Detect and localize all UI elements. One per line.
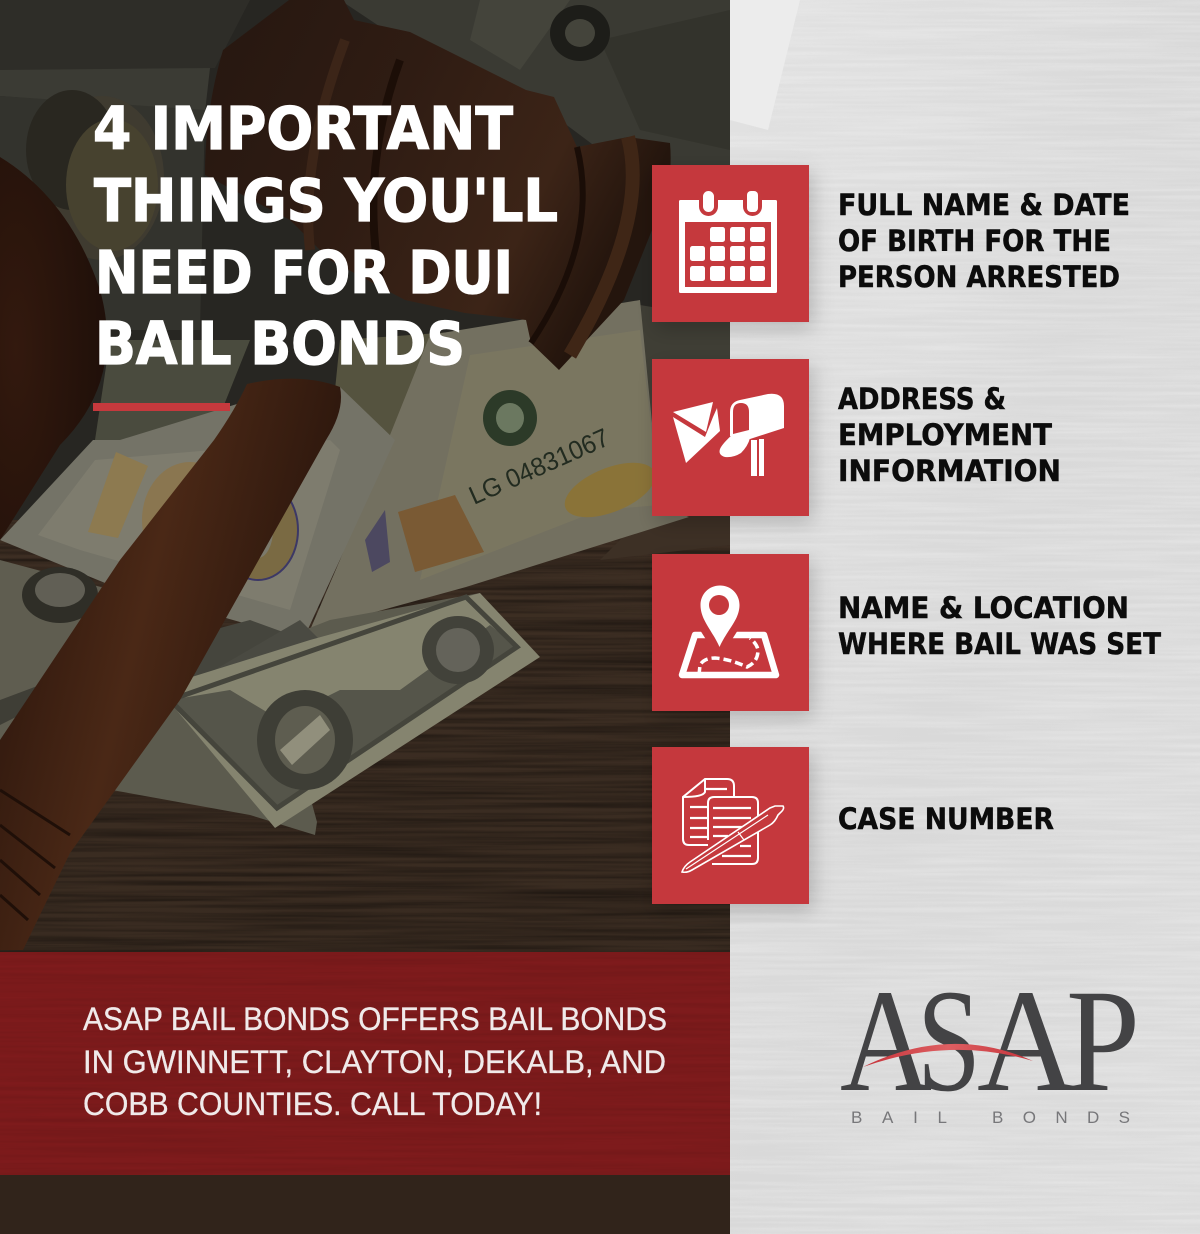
- one dollar bill: [150, 593, 540, 828]
- gavel head: [205, 0, 671, 370]
- logo tagline: BONDS: [992, 1108, 1130, 1127]
- photo panel: gavel and money on wood: [0, 0, 730, 1234]
- bill with large 100 numerals: [0, 387, 395, 640]
- lower left bill: [0, 560, 180, 760]
- call to action text: [83, 1001, 667, 1122]
- call to action band: [0, 952, 730, 1175]
- card 4 text: CASE NUMBER: [838, 802, 1054, 836]
- title: 4 IMPORTANT: [93, 94, 513, 163]
- card 1 text: OF BIRTH FOR THE: [838, 224, 1111, 258]
- card 2 text: [838, 382, 1061, 488]
- top bills: [0, 0, 730, 505]
- bill with serial number: [310, 300, 689, 630]
- call to action text: IN GWINNETT, CLAYTON, DEKALB, AND: [83, 1044, 666, 1080]
- icon: calendar: [679, 189, 777, 293]
- right textured panel: [730, 0, 1200, 1234]
- bill with serial number: LG 04831067: [464, 422, 613, 510]
- title: NEED FOR DUI: [95, 238, 513, 307]
- title underline: [93, 403, 230, 411]
- wood below band: [0, 1175, 730, 1234]
- call to action text: ASAP BAIL BONDS OFFERS BAIL BONDS: [83, 1001, 667, 1037]
- title: [93, 94, 558, 378]
- title: THINGS YOU'LL: [94, 166, 558, 235]
- card 2: mailbox: [652, 359, 809, 516]
- icon: envelope and mailbox: [673, 394, 784, 476]
- icon: documents and pen: [682, 779, 784, 872]
- card 1 text: [838, 188, 1130, 294]
- grey bill under the one dollar note: [112, 593, 480, 835]
- card 1 text: PERSON ARRESTED: [838, 260, 1120, 294]
- logo tagline: BAIL: [851, 1108, 947, 1127]
- logo: ASAP Bail Bonds: P: [1066, 959, 1140, 1122]
- icon: map with location pin: [682, 586, 776, 675]
- title: BAIL BONDS: [95, 309, 465, 378]
- card 3: map: [652, 554, 809, 711]
- sound block: [0, 157, 107, 540]
- card 4: documents: [652, 747, 809, 904]
- card 1: calendar: [652, 165, 809, 322]
- logo tagline: [851, 1108, 1130, 1127]
- logo: ASAP Bail Bonds: [840, 959, 1140, 1127]
- card 1 text: FULL NAME & DATE: [838, 188, 1130, 222]
- call to action text: COBB COUNTIES. CALL TODAY!: [83, 1086, 542, 1122]
- card 2 text: ADDRESS &: [838, 382, 1006, 416]
- gavel handle: [0, 379, 341, 950]
- card 2 text: INFORMATION: [838, 454, 1061, 488]
- card 3 text: [838, 591, 1161, 661]
- logo: ASAP Bail Bonds: A: [977, 959, 1077, 1122]
- card 3 text: NAME & LOCATION: [838, 591, 1129, 625]
- card 2 text: EMPLOYMENT: [838, 418, 1052, 452]
- logo: ASAP Bail Bonds: A: [840, 959, 932, 1122]
- logo swoosh: [863, 1044, 1033, 1067]
- card 3 text: WHERE BAIL WAS SET: [838, 627, 1161, 661]
- logo: ASAP Bail Bonds: S: [917, 959, 981, 1122]
